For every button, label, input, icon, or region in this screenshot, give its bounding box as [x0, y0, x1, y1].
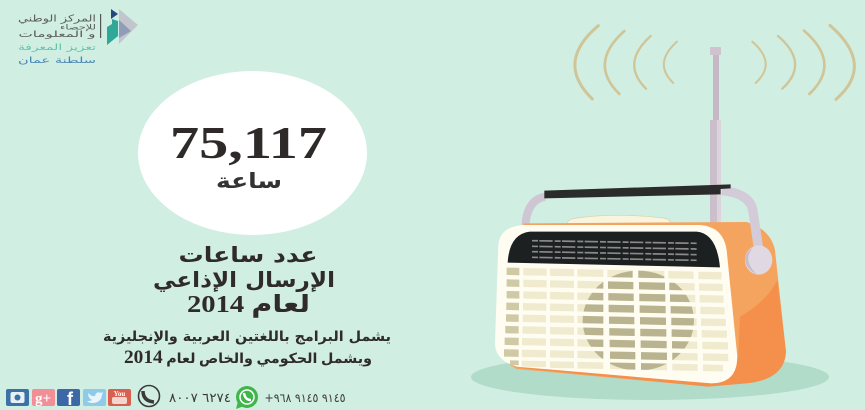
logo name: و المعلومات — [18, 30, 96, 40]
radio ground shadow — [471, 354, 829, 400]
unit label: ساعة — [216, 169, 282, 193]
radio body shade — [513, 280, 786, 387]
icon: facebook: f — [67, 389, 74, 409]
phone number: ٨٠٠٧ ٦٢٧٤ — [169, 391, 231, 406]
heading: عدد ساعات — [178, 243, 318, 267]
panel: hours stat circle — [138, 71, 367, 235]
radio top knob — [567, 215, 671, 223]
description text: ويشمل الحكومي والخاص لعام 2014 — [124, 347, 372, 368]
radio back body — [510, 222, 786, 387]
icon: youtube: You — [114, 390, 125, 398]
right handle arm — [722, 191, 759, 253]
logo name: المركز الوطني — [18, 14, 96, 24]
logo name: للإحصاء — [60, 24, 96, 32]
social media bar — [6, 386, 346, 409]
dial scale lines — [532, 241, 697, 260]
black dial panel — [508, 232, 720, 267]
icon: radio — [495, 184, 786, 387]
speaker grille — [504, 268, 728, 372]
right handle hub — [745, 245, 772, 275]
icon: instagram — [6, 389, 29, 406]
icon: radio antenna — [710, 47, 721, 225]
icon: youtube — [108, 389, 131, 406]
logo country: سلطنة عمان — [18, 56, 96, 66]
icon: google plus — [32, 389, 55, 407]
heading — [153, 243, 335, 318]
icon: twitter — [83, 389, 106, 406]
heading: لعام 2014 — [187, 292, 310, 318]
logo mark — [107, 9, 138, 45]
big number: 75,117 — [170, 118, 327, 168]
whatsapp number: +٩٦٨ ٩١٤٥ ٩١٤٥ — [264, 391, 346, 405]
icon: google plus: g+ — [35, 391, 51, 407]
icon: facebook — [57, 389, 80, 409]
logo: national centre for statistics and information — [18, 9, 138, 66]
description text: يشمل البرامج باللغتين العربية والإنجليزية — [103, 329, 391, 345]
left handle arm — [525, 197, 545, 227]
radio front face — [495, 225, 737, 383]
description text — [103, 329, 391, 368]
heading: الإرسال الإذاعي — [153, 268, 335, 292]
logo name — [18, 14, 96, 40]
icon: phone — [138, 386, 160, 406]
icon: radio waves — [575, 25, 854, 99]
carrying bar — [544, 184, 731, 198]
logo tagline: تعزيز المعرفة — [18, 43, 97, 53]
icon: whatsapp — [236, 386, 258, 409]
logo divider — [100, 14, 101, 38]
